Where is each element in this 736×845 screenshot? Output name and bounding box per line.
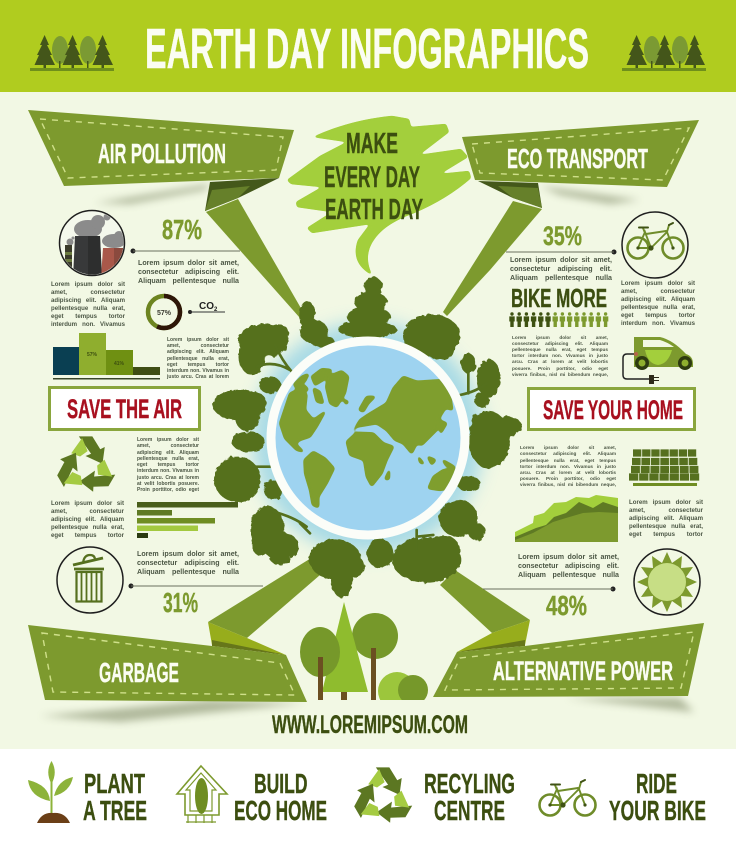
callout box: save the air: SAVE THE AIR (67, 394, 182, 424)
text: alternative power intro (518, 552, 619, 578)
text: under bike more: Lorem ipsum dolor sit amet, (512, 335, 608, 340)
icon: trash can (57, 547, 123, 613)
CO2 label: 2 (214, 307, 218, 313)
text: under bicycle: adipiscing elit. Aliquam (621, 296, 695, 303)
text: under recycle: eget tempus tortor (51, 532, 124, 539)
text: under bike more: consectetur adipiscing elit. Aliquam (512, 341, 608, 346)
text: under bicycle: eget tempus tortor (621, 312, 695, 319)
icon: sun (634, 549, 700, 615)
text: beside area chart: Lorem ipsum dolor sit (629, 499, 703, 506)
text: under save your home: viverra finibus, nisl mi bibendum neque, (520, 482, 616, 487)
text: under smokestack: adipiscing elit. Aliquam (51, 296, 125, 304)
text: beside recycle: amet, consectetur (137, 443, 199, 449)
text: beside bar chart: pellentesque nulla erat, (167, 356, 229, 362)
text: under smokestack: interdum non. Vivamus (51, 320, 125, 328)
horizontal bars (137, 502, 238, 538)
icon: recycle (52, 437, 118, 496)
stat 35%: 35% (543, 221, 582, 251)
text: beside recycle: Proin porttitor, odio eget (137, 487, 199, 493)
text: beside area chart: eget tempus tortor (629, 531, 703, 538)
text: under save your home: pellentesque nulla erat, eget tempus (520, 458, 616, 463)
donut chart 57% (148, 296, 180, 328)
footer: build eco home (177, 766, 327, 826)
round tree left (300, 627, 340, 700)
footer: ride your bike: RIDE (636, 768, 677, 799)
text: eco transport intro (510, 256, 612, 282)
stat 87%: 87% (162, 214, 202, 245)
text: beside bar chart (166, 337, 229, 380)
text: air pollution intro: consectetur adipiscing elit. (138, 268, 239, 276)
text: beside area chart: adipiscing elit. Aliquam (629, 515, 703, 522)
text: under save your home (520, 445, 616, 487)
text: under bike more: viverra finibus, nisl mi bibendum neque, (512, 372, 608, 377)
text: under bicycle: amet, consectetur (621, 288, 695, 295)
text: under smokestack (51, 280, 125, 328)
ribbon: air pollution (28, 110, 302, 318)
text: under bike more: tortor interdum non. Vivamus in justo (512, 353, 608, 358)
text: beside bar chart: Lorem ipsum dolor sit (167, 337, 229, 343)
text: alternative power intro: consectetur adipiscing elit. (518, 562, 619, 570)
text: garbage intro: Aliquam pellentesque nulla (137, 568, 239, 576)
ribbon: eco transport (443, 120, 699, 316)
text: under smokestack: amet, consectetur (51, 288, 125, 296)
text: under save your home: Lorem ipsum dolor sit amet, (520, 445, 616, 450)
text: garbage intro: consectetur adipiscing elit. (137, 559, 239, 567)
bar chart (53, 333, 160, 380)
trees around globe (213, 277, 522, 597)
text: under bike more: pellentesque nulla erat, eget tempus (512, 347, 608, 352)
globe (266, 336, 470, 540)
text: beside recycle (136, 437, 199, 493)
website url: WWW.LOREMIPSUM.COM (272, 711, 468, 739)
header band (0, 0, 736, 92)
footer: ride your bike (540, 768, 706, 826)
text: beside recycle: justo arcu. Cras at lorem (137, 475, 199, 481)
text: under bicycle: interdum non. Vivamus (621, 320, 695, 327)
text: beside area chart (629, 499, 703, 538)
text: alternative power intro: Lorem ipsum dolor sit amet, (518, 552, 619, 560)
text: beside recycle: at velit lobortis posuere. (137, 481, 199, 487)
text: beside bar chart: amet, consectetur (167, 343, 229, 349)
text: beside bar chart: adipiscing elit. Aliquam (167, 349, 229, 355)
text: beside recycle: adipiscing elit. Aliquam (137, 450, 199, 456)
text: under recycle: amet, consectetur (51, 508, 124, 515)
slogan: EARTH DAY (325, 194, 423, 226)
text: under smokestack: Lorem ipsum dolor sit (51, 280, 125, 288)
text: under recycle (51, 500, 124, 539)
text: beside bar chart: interdum non. Vivamus in (167, 368, 229, 374)
icon: smokestacks (60, 210, 126, 278)
footer band (0, 749, 736, 845)
donut chart 57%: 57% (157, 310, 172, 317)
footer: recycling centre: CENTRE (434, 795, 505, 826)
text: under bike more (512, 335, 608, 377)
callout box: save the air (50, 388, 200, 430)
cone tree (322, 602, 368, 700)
round tree right (352, 613, 398, 700)
footer: plant a tree (28, 761, 147, 826)
text: under recycle: adipiscing elit. Aliquam (51, 516, 124, 523)
ribbon: air pollution: AIR POLLUTION (98, 138, 226, 169)
footer: plant a tree: PLANT (84, 768, 145, 799)
text: under save your home: arcu. Cras at lorem at velit lobortis (520, 470, 616, 475)
slogan: MAKE (346, 128, 398, 160)
text: under bike more: arcu. Cras at lorem at velit lobortis (512, 359, 608, 364)
people pictogram (509, 312, 608, 327)
text: under recycle: pellentesque nulla erat, (51, 524, 124, 531)
text: under bicycle: pellentesque nulla erat, (621, 304, 695, 311)
ribbon: garbage (28, 555, 320, 702)
text: under recycle: Lorem ipsum dolor sit (51, 500, 124, 507)
text: under smokestack: pellentesque nulla erat, (51, 304, 125, 312)
BIKE MORE heading: BIKE MORE (511, 283, 607, 313)
text: air pollution intro (138, 258, 239, 284)
ribbon: garbage: GARBAGE (99, 657, 179, 688)
text: beside bar chart: eget tempus tortor (167, 362, 229, 368)
footer: recycling centre (349, 768, 515, 827)
text: beside area chart: amet, consectetur (629, 507, 703, 514)
text: beside recycle: pellentesque nulla erat, (137, 456, 199, 462)
text: under smokestack: eget tempus tortor (51, 312, 125, 320)
text: garbage intro: Lorem ipsum dolor sit amet, (137, 550, 239, 558)
slogan (324, 128, 423, 226)
bottom trees illustration (300, 602, 428, 710)
text: eco transport intro: Lorem ipsum dolor sit amet, (510, 256, 612, 264)
text: beside area chart: pellentesque nulla erat, (629, 523, 703, 530)
text: under bicycle (621, 280, 695, 327)
connector 48% (483, 586, 616, 592)
text: beside recycle: Lorem ipsum dolor sit (137, 437, 199, 443)
area chart (515, 495, 618, 542)
text: beside recycle: eget tempus tortor (137, 462, 199, 468)
CO2 label: CO (199, 301, 214, 312)
text: under save your home: consectetur adipiscing elit. Aliquam (520, 451, 616, 456)
footer: recycling centre: RECYLING (424, 768, 515, 799)
icon: solar panel (629, 453, 700, 486)
bush dark (398, 675, 428, 700)
icon: trees right (622, 35, 706, 71)
text: under save your home: tortor interdum non. Vivamus in justo (520, 464, 616, 469)
icon: bicycle in circle (622, 212, 688, 278)
slogan: EVERY DAY (324, 161, 420, 194)
icon: electric car (623, 337, 693, 384)
green brush cloud (287, 116, 471, 275)
ribbon shadows (40, 184, 694, 722)
ribbon: alternative power (433, 570, 704, 697)
connector 35% (506, 250, 616, 254)
text: garbage intro (137, 550, 239, 576)
text: under save your home: posuere. Proin porttitor, odio eget (520, 476, 616, 481)
CO2 label (188, 301, 225, 314)
connector 31% (128, 584, 263, 588)
globe glow (252, 322, 484, 554)
footer: build eco home: ECO HOME (234, 795, 327, 826)
bush light (378, 672, 408, 700)
callout box: save your home (528, 388, 694, 430)
text: under bike more: posuere. Proin porttitor, odio eget (512, 366, 608, 371)
footer: build eco home: BUILD (254, 768, 308, 799)
stat 31%: 31% (163, 587, 198, 618)
connector 87% (130, 248, 240, 254)
bar chart: 57% (87, 352, 98, 358)
stat 48%: 48% (546, 590, 587, 621)
text: beside recycle: interdum non. Vivamus in (137, 468, 199, 474)
continents (280, 369, 457, 507)
text: beside bar chart: justo arcu. Cras at lorem (167, 374, 229, 380)
text: air pollution intro: Aliquam pellentesque nulla (138, 276, 239, 284)
text: air pollution intro: Lorem ipsum dolor sit amet, (138, 258, 239, 266)
icon: trees left (30, 35, 114, 71)
text: eco transport intro: consectetur adipiscing elit. (510, 265, 612, 273)
text: under bicycle: Lorem ipsum dolor sit (621, 280, 695, 287)
text: eco transport intro: Aliquam pellentesque nulla (510, 274, 612, 282)
bar chart: 41% (114, 361, 125, 367)
footer: plant a tree: A TREE (83, 795, 147, 826)
text: alternative power intro: Aliquam pellentesque nulla (518, 570, 619, 578)
